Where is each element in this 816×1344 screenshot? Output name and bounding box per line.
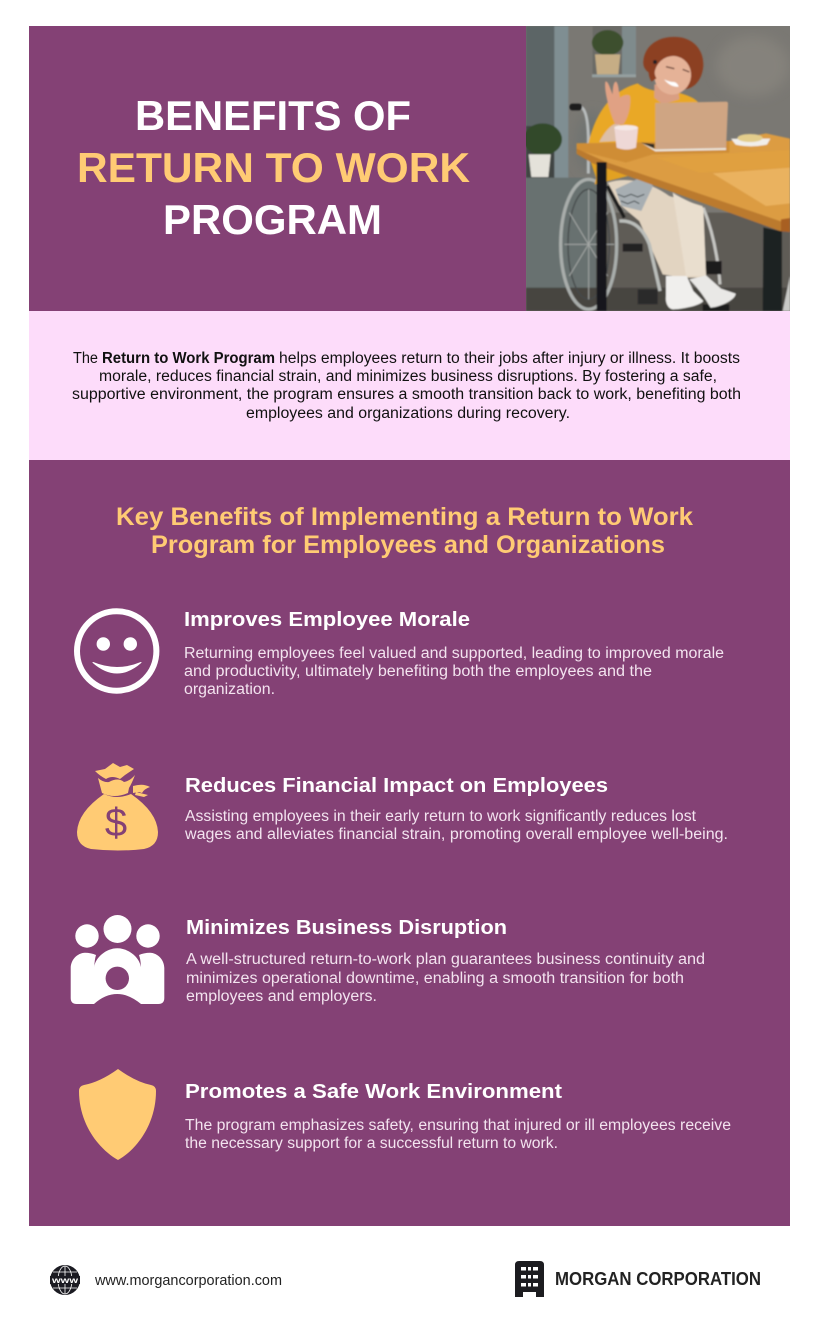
intro text: supportive environment, the program ensures a smooth transition back to work, benefiting both bbox=[72, 386, 741, 403]
laptop bbox=[655, 102, 728, 151]
benefit: financial bbox=[77, 763, 728, 850]
icon: money bag bbox=[77, 763, 158, 850]
section heading bbox=[116, 503, 693, 559]
benefit: safety bbox=[79, 1069, 731, 1160]
heading: safety: Promotes a Safe Work Environment bbox=[185, 1080, 562, 1103]
heading: financial: Reduces Financial Impact on Employees bbox=[185, 774, 608, 797]
intro text bbox=[72, 350, 741, 422]
intro panel bbox=[29, 311, 790, 460]
icon: globe bbox=[50, 1265, 80, 1295]
text: safety: The program emphasizes safety, ensuring that injured or ill employees receive bbox=[185, 1117, 731, 1134]
title: BENEFITS OF bbox=[135, 92, 411, 139]
text: morale: and productivity, ultimately benefiting both the employees and the bbox=[184, 663, 652, 680]
section heading: Key Benefits of Implementing a Return to Work bbox=[116, 503, 693, 531]
black frame bbox=[608, 186, 624, 218]
plate bbox=[731, 139, 770, 146]
icon: office building bbox=[515, 1261, 544, 1297]
intro text: Return to Work Program bbox=[102, 350, 275, 367]
table bbox=[577, 133, 790, 232]
footer: website bbox=[50, 1265, 282, 1295]
benefits panel bbox=[29, 460, 790, 1226]
icon: shield bbox=[79, 1069, 156, 1160]
heading: disruption: Minimizes Business Disruption bbox=[186, 916, 507, 939]
hand bbox=[605, 81, 630, 124]
text: disruption: employees and employers. bbox=[186, 988, 377, 1005]
arm bbox=[599, 123, 628, 142]
upper plant bbox=[592, 30, 623, 55]
title: PROGRAM bbox=[163, 196, 382, 243]
intro text: The bbox=[73, 350, 98, 367]
text: morale: organization. bbox=[184, 681, 275, 698]
shoes bbox=[666, 276, 703, 309]
text: financial bbox=[184, 808, 728, 843]
text: disruption: A well-structured return-to-work plan guarantees business continuity and bbox=[186, 951, 705, 968]
icon: group of people bbox=[71, 915, 164, 1004]
text: financial: Assisting employees in their early return to work significantly reduces lost bbox=[185, 808, 697, 825]
website address: www.morgancorporation.com bbox=[94, 1273, 282, 1289]
footer: company bbox=[515, 1261, 761, 1297]
intro text: helps employees return to their jobs after injury or illness. It boosts bbox=[279, 350, 740, 367]
neck and head bbox=[654, 84, 679, 104]
table legs bbox=[597, 162, 607, 311]
section heading: Program for Employees and Organizations bbox=[151, 531, 665, 559]
text: morale: Returning employees feel valued and supported, leading to improved morale bbox=[184, 645, 724, 662]
intro text: morale, reduces financial strain, and minimizes business disruptions. By fostering a safe, bbox=[99, 368, 717, 385]
icon: globe: www bbox=[51, 1275, 78, 1285]
lap and legs bbox=[608, 180, 706, 278]
title: RETURN TO WORK bbox=[77, 144, 470, 191]
title bbox=[77, 92, 470, 243]
benefit: disruption bbox=[71, 915, 705, 1005]
photo: woman in wheelchair at a desk with laptop bbox=[526, 26, 790, 311]
company name: MORGAN CORPORATION bbox=[555, 1269, 761, 1289]
text: disruption: minimizes operational downtime, enabling a smooth transition for both bbox=[186, 970, 684, 987]
intro text: employees and organizations during recovery. bbox=[246, 405, 570, 422]
text: financial: wages and alleviates financial strain, promoting overall employee well-being. bbox=[184, 826, 728, 843]
icon: smiley face bbox=[77, 611, 156, 691]
lower plant bbox=[523, 123, 562, 155]
cup bbox=[614, 125, 638, 150]
text: safety bbox=[185, 1117, 731, 1152]
benefit: morale bbox=[77, 608, 724, 698]
icon: money bag: $ bbox=[105, 801, 127, 845]
text: morale bbox=[184, 645, 724, 698]
heading: morale: Improves Employee Morale bbox=[184, 608, 470, 631]
wheelchair handle and wheel bbox=[571, 107, 588, 174]
text: disruption bbox=[186, 951, 705, 1005]
title panel bbox=[29, 26, 526, 311]
text: safety: the necessary support for a successful return to work. bbox=[185, 1135, 558, 1152]
yellow top bbox=[589, 83, 698, 148]
